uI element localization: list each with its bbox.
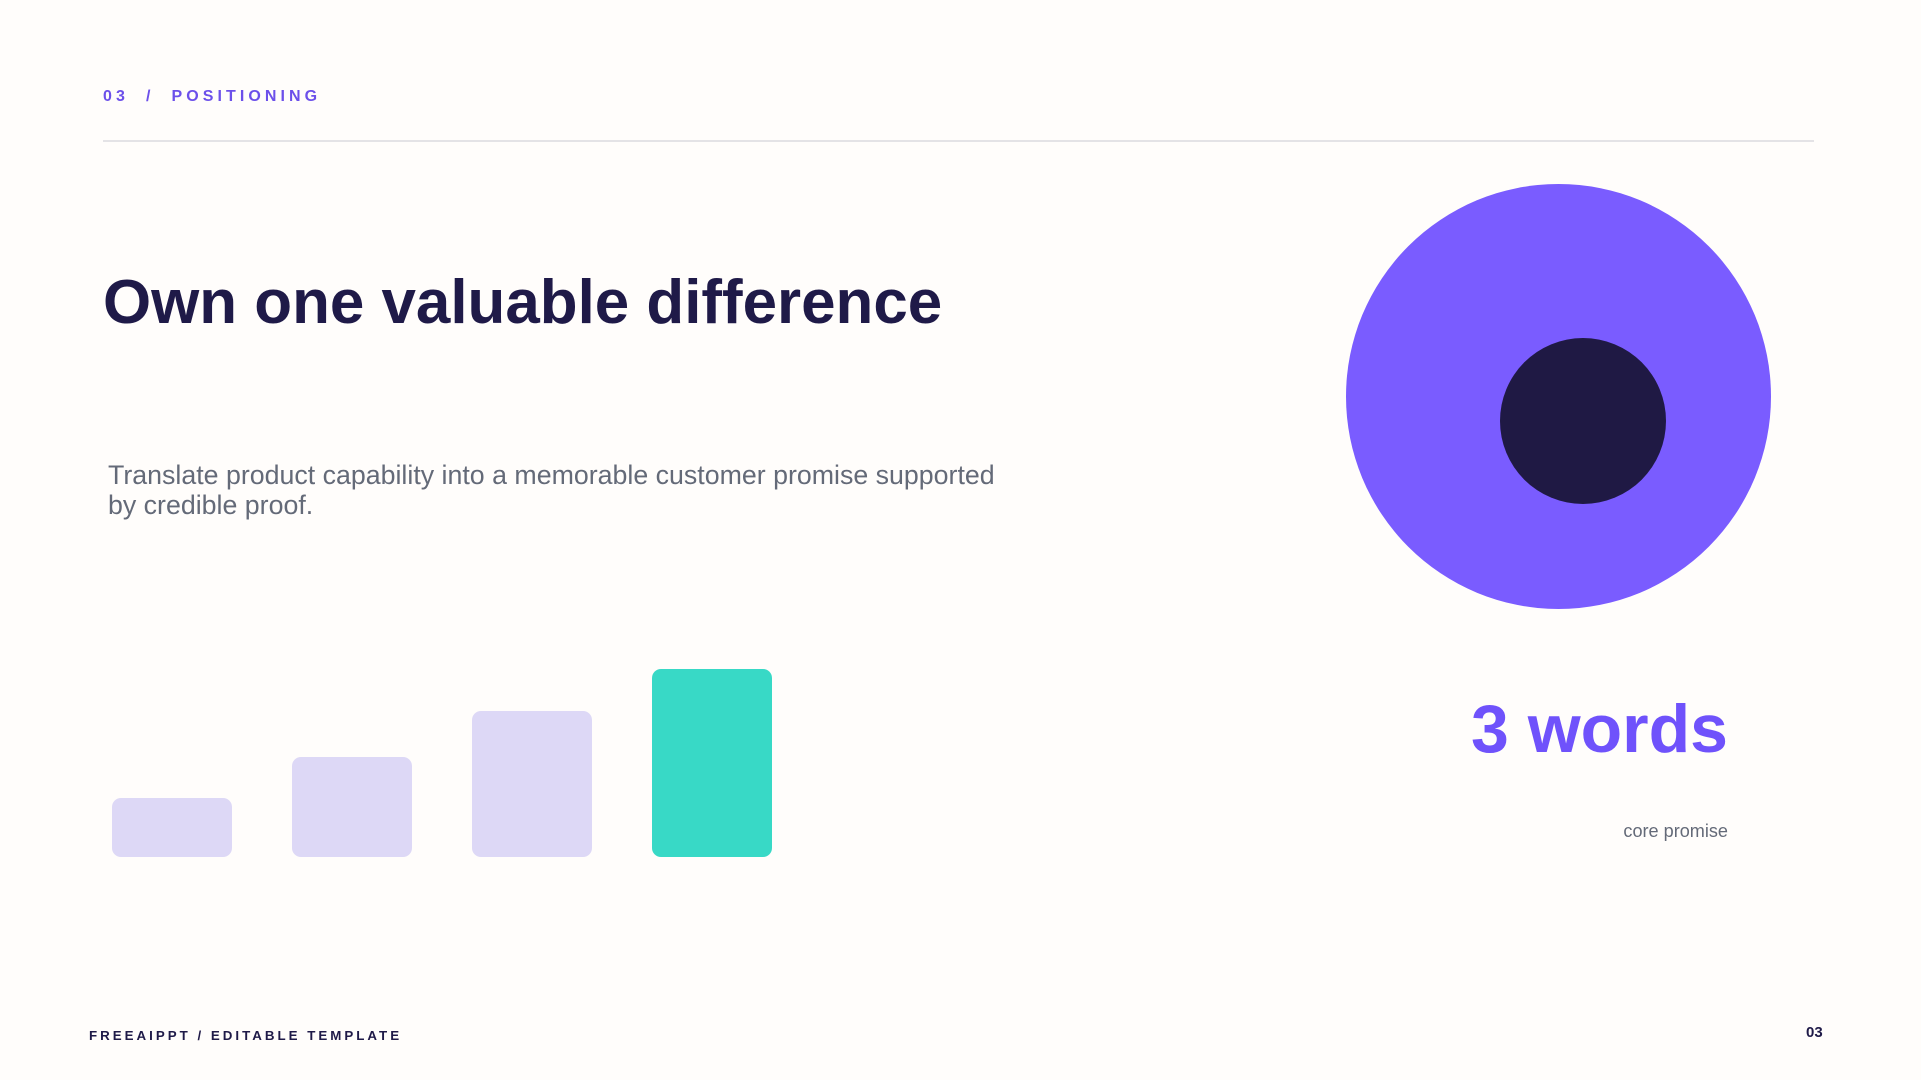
bar 4 highlighted — [652, 669, 772, 857]
bar 2 — [292, 757, 412, 857]
bar 1 — [112, 798, 232, 857]
body text: Translate product capability into a memorable customer promise supported by credible proof. — [108, 460, 995, 520]
inner circle — [1500, 338, 1666, 504]
outer circle — [1346, 184, 1771, 609]
footer text: FREEAIPPT / EDITABLE TEMPLATE — [89, 1028, 402, 1043]
title: Own one valuable difference — [103, 268, 942, 337]
section label: 03 / POSITIONING — [103, 88, 321, 105]
stat label: core promise — [1623, 821, 1728, 841]
stat value: 3 words — [1471, 691, 1728, 767]
bar 3 — [472, 711, 592, 857]
bar chart — [112, 669, 772, 857]
page number: 03 — [1806, 1024, 1823, 1041]
